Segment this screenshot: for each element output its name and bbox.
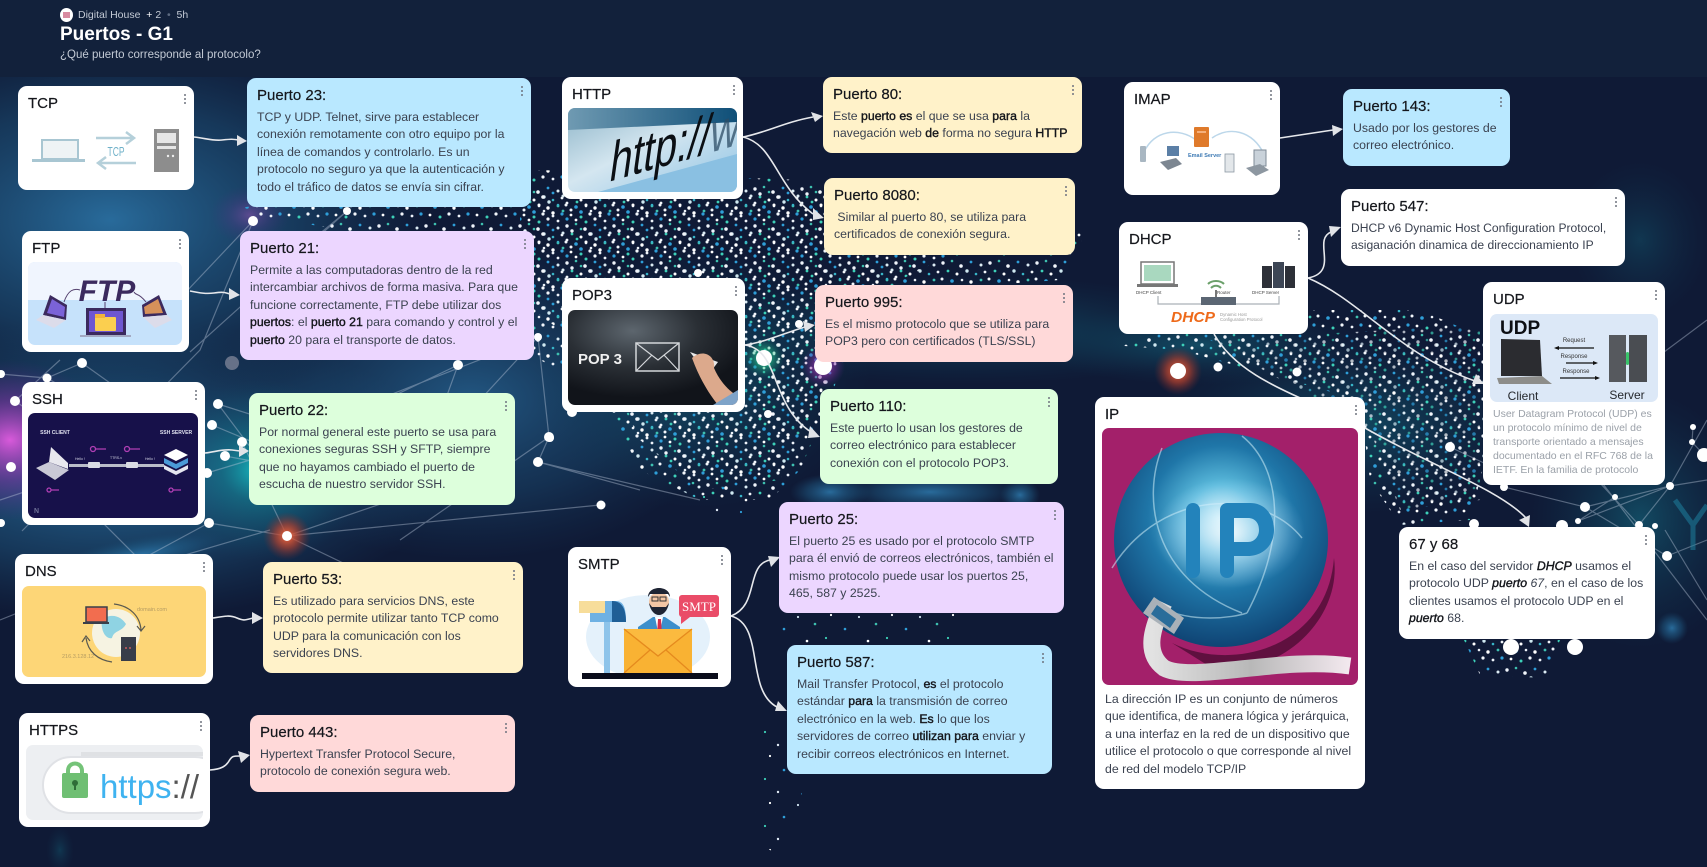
panel: Puerto 110: conexión con el protocolo POP3.	[830, 456, 1009, 470]
icon: email server diagram: Email Server	[1188, 153, 1222, 159]
panel: Puerto 22: escucha de nuestro servidor SSH.	[259, 477, 446, 491]
text block: IP description: La dirección IP es un conjunto de números	[1105, 692, 1338, 706]
panel: HTTPS: HTTPS	[29, 722, 78, 739]
panel: Puerto 587: Puerto 587:	[797, 654, 875, 671]
text block: IP description	[1105, 692, 1351, 776]
arrow: SMTP to Puerto 25	[731, 556, 780, 616]
panel: TCP	[18, 86, 194, 190]
panel: Puerto 443: Puerto 443:	[260, 724, 338, 741]
icon: UDP client server diagram: Server	[1609, 388, 1645, 402]
panel: SMTP	[568, 547, 731, 687]
panel: Puerto 25: El puerto 25 es usado por el protocolo SMTP	[789, 534, 1034, 548]
arrow: DHCP to UDP	[1308, 278, 1484, 384]
panel: Puerto 547	[1341, 189, 1625, 266]
panel: Puerto 995: POP3 pero con certificados (TLS/SSL)	[825, 334, 1036, 348]
panel: Puerto 110	[820, 389, 1058, 484]
panel: POP3: POP3	[572, 287, 612, 304]
icon: https address bar	[26, 745, 203, 820]
text block: IP description: utilice el protocolo o que corresponde al nivel	[1105, 744, 1351, 758]
panel: Puerto 23	[247, 78, 531, 207]
icon: DNS illustration: domain.com	[137, 607, 167, 613]
panel: Puerto 25: mismo protocolo puede usar los puertos 25,	[789, 569, 1028, 583]
icon: SSH tunnel diagram: SSH SERVER	[160, 430, 192, 436]
panel: DNS	[15, 554, 213, 684]
panel: HTTP	[562, 77, 743, 199]
arrow: POP3 to Puerto 995	[745, 321, 815, 345]
icon: DHCP network diagram: DHCP Client	[1136, 290, 1162, 295]
panel: 67 y 68: protocolo UDP puerto 67, en el caso de los	[1409, 576, 1643, 590]
title: Puertos - G1	[60, 24, 173, 45]
panel: DHCP: DHCP	[1129, 231, 1172, 248]
panel: Puerto 23: TCP y UDP. Telnet, sirve para establecer	[257, 110, 479, 124]
panel: 67 y 68: puerto 68.	[1409, 611, 1464, 625]
panel: Puerto 443	[250, 715, 515, 792]
arrow: HTTPS to Puerto 443	[210, 751, 250, 770]
panel: Puerto 995	[815, 285, 1073, 362]
arrow: SMTP to Puerto 587	[731, 616, 787, 711]
panel: Puerto 80: Puerto 80:	[833, 86, 902, 103]
panel: Puerto 53: servidores DNS.	[273, 646, 363, 660]
panel: HTTP: HTTP	[572, 86, 611, 103]
panel: Puerto 23: línea de comandos y controlarlo. Es un	[257, 145, 470, 159]
panel: Puerto 143	[1343, 89, 1510, 166]
panel: SSH	[22, 382, 205, 525]
panel: Puerto 53: UDP para la comunicación con los	[273, 629, 461, 643]
icon: DNS illustration: 216.3.128.12	[62, 654, 94, 660]
icon: SSH tunnel diagram	[28, 413, 198, 518]
panel: Puerto 547: asiganación dinamica de direccionamiento IP	[1351, 238, 1594, 252]
panel: UDP	[1483, 282, 1665, 485]
panel: HTTPS	[19, 713, 210, 827]
header band	[0, 0, 1707, 77]
arrow: POP3 to Puerto 110	[745, 345, 820, 438]
icon: SSH tunnel diagram: N	[34, 508, 39, 515]
icon: SMTP illustration: SMTP	[682, 599, 716, 614]
panel: Puerto 25	[779, 502, 1064, 613]
panel: IP: IP	[1105, 406, 1119, 423]
panel: Puerto 587: Mail Transfer Protocol, es el protocolo	[797, 677, 1003, 691]
text block: IP description: que identifica, de manera lógica y jerárquica,	[1105, 709, 1349, 723]
text block: UDP description: User Datagram Protocol (UDP) es	[1493, 408, 1652, 420]
panel: DNS: DNS	[25, 563, 57, 580]
icon: DHCP network diagram: Router	[1217, 290, 1231, 295]
panel: Puerto 22	[249, 393, 515, 505]
icon: POP 3 envelope photo: POP 3	[578, 351, 622, 368]
icon: DNS illustration	[22, 586, 206, 677]
panel: Puerto 443: protocolo de conexión segura web.	[260, 764, 451, 778]
panel: Puerto 143: Usado por los gestores de	[1353, 121, 1497, 135]
icon: email server diagram	[1140, 127, 1269, 176]
panel: IMAP: IMAP	[1134, 91, 1171, 108]
panel: Puerto 21	[240, 231, 534, 360]
icon: SSH tunnel diagram: SSH CLIENT	[40, 430, 70, 436]
panel: Puerto 21: Puerto 21:	[250, 240, 319, 257]
avatar icon	[60, 8, 73, 22]
icon: DHCP network diagram	[1136, 261, 1295, 326]
icon: https address bar: https://	[100, 768, 200, 805]
panel: Puerto 23: Puerto 23:	[257, 87, 326, 104]
panel: UDP: UDP	[1493, 291, 1525, 308]
arrow: SSH to Puerto 22	[205, 445, 249, 457]
panel: Puerto 23: conexión remotamente con otro equipo por la	[257, 127, 504, 141]
icon: FTP illustration	[28, 262, 182, 345]
text block: UDP description: documentado en el RFC 768 de la	[1493, 450, 1653, 462]
panel: Puerto 21: puertos: el puerto 21 para comando y control y el	[250, 315, 517, 329]
text block: UDP description: IETF. En la familia de protocolo	[1493, 464, 1638, 476]
icon: UDP client server diagram	[1490, 314, 1658, 402]
icon: SSH tunnel diagram: Hello !	[145, 457, 155, 461]
arrow: DNS to Puerto 53	[213, 612, 263, 624]
panel: 67 y 68: 67 y 68	[1409, 536, 1458, 553]
panel: FTP: FTP	[32, 240, 60, 257]
panel: Puerto 21: Permite a las computadoras dentro de la red	[250, 263, 493, 277]
panel: Puerto 53	[263, 562, 523, 673]
arrow: DHCP to Puerto 547	[1308, 226, 1341, 278]
panel: Puerto 80: navegación web de forma no segura HTTP	[833, 126, 1067, 140]
panel: Puerto 53: Puerto 53:	[273, 571, 342, 588]
panel: Puerto 8080	[824, 178, 1075, 255]
nodes	[0, 207, 1707, 655]
arrow: IMAP to Puerto 143	[1280, 125, 1343, 138]
panel: Puerto 143: correo electrónico.	[1353, 138, 1454, 152]
icon: IP globe	[1102, 428, 1358, 685]
panel: Puerto 547: Puerto 547:	[1351, 198, 1429, 215]
continents of dots	[225, 170, 1085, 500]
glows	[0, 30, 430, 410]
icon: SMTP illustration	[579, 588, 719, 679]
panel: Puerto 8080: Puerto 8080:	[834, 187, 920, 204]
panel: Puerto 22: que no hayamos cambiado el puerto de	[259, 460, 475, 474]
panel: Puerto 110: correo electrónico para establecer	[830, 438, 1016, 452]
network lines	[0, 211, 1707, 620]
panel: Puerto 22: Por normal general este puerto se usa para	[259, 425, 496, 439]
panel: Puerto 587: servidores de correo utilizan para enviar y	[797, 729, 1025, 743]
icon: DHCP network diagram: DHCP Server	[1252, 290, 1280, 295]
panel: TCP: TCP	[28, 95, 58, 112]
panel: Puerto 25: 465, 587 y 2525.	[789, 586, 881, 600]
panel: Puerto 547: DHCP v6 Dynamic Host Configuration Protocol,	[1351, 221, 1606, 235]
panel: 67 y 68	[1399, 527, 1655, 639]
panel: Puerto 22: Puerto 22:	[259, 402, 328, 419]
panel: 67 y 68: En el caso del servidor DHCP usamos el	[1409, 559, 1631, 573]
icon: SSH tunnel diagram: TTRS-v	[110, 456, 122, 460]
panel: Puerto 21: funcione correctamente, FTP debe utilizar dos	[250, 298, 501, 312]
workspace line: Digital House + 2 • 5h	[78, 9, 188, 21]
icon: UDP client server diagram: Response	[1562, 369, 1590, 375]
panel: 67 y 68: clientes usamos el protocolo UDP en el	[1409, 594, 1623, 608]
text block: IP description: de red del modelo TCP/IP	[1105, 762, 1246, 776]
panel: Puerto 587: estándar para la transmisión de correo	[797, 694, 1008, 708]
panel: Puerto 587	[787, 645, 1052, 774]
panel: Puerto 23: todo el tráfico de datos se envía sin cifrar.	[257, 180, 484, 194]
icon: TCP diagram: TCP	[108, 144, 124, 159]
arrow: DHCP to 67 y 68	[1214, 334, 1530, 527]
panel: SMTP: SMTP	[578, 556, 620, 573]
panel: Puerto 53: Es utilizado para servicios DNS, este	[273, 594, 475, 608]
arrow: FTP to Puerto 21	[190, 288, 240, 300]
icon: UDP client server diagram: Request	[1563, 338, 1586, 344]
icon: FTP illustration: FTP	[79, 275, 136, 308]
panel: IMAP	[1124, 82, 1280, 195]
panel: Puerto 8080: Similar al puerto 80, se utiliza para	[837, 210, 1026, 224]
panel: Puerto 587: electrónico en la web. Es lo que los	[797, 712, 990, 726]
panel: Puerto 21: intercambiar archivos de forma masiva. Para que	[250, 280, 518, 294]
icon: UDP client server diagram: UDP	[1500, 318, 1540, 339]
panel: Puerto 21: puerto 20 para el transporte de datos.	[250, 333, 456, 347]
panel: POP3	[562, 278, 745, 412]
panel: Puerto 25: Puerto 25:	[789, 511, 858, 528]
panel: Puerto 995: Puerto 995:	[825, 294, 903, 311]
panel: Puerto 80: Este puerto es el que se usa para la	[833, 109, 1030, 123]
panel: Puerto 80	[823, 77, 1082, 153]
text block: UDP description	[1493, 408, 1653, 476]
panel: SSH: SSH	[32, 391, 63, 408]
text block: UDP description: transporte orientado a mensajes	[1493, 436, 1644, 448]
icon: DHCP network diagram: DHCP	[1171, 309, 1216, 326]
panel: Puerto 443: Hypertext Transfer Protocol Secure,	[260, 747, 455, 761]
panel: Puerto 8080: certificados de conexión segura.	[834, 227, 1010, 241]
arrow: HTTP to Puerto 8080	[743, 137, 824, 220]
icon: UDP client server diagram: Response	[1560, 354, 1588, 360]
icon: SSH tunnel diagram: Hello !	[75, 457, 85, 461]
arrow: TCP to Puerto 23	[194, 135, 247, 146]
panel: Puerto 53: protocolo permite utilizar tanto TCP como	[273, 611, 499, 625]
icon: POP 3 envelope photo	[568, 310, 738, 405]
panel: Puerto 110: Este puerto lo usan los gestores de	[830, 421, 1023, 435]
panel: DHCP	[1119, 222, 1308, 334]
panel: Puerto 995: Es el mismo protocolo que se utiliza para	[825, 317, 1049, 331]
panel: Puerto 23: protocolo no seguro ya que la autenticación y	[257, 162, 504, 176]
panel: IP	[1095, 397, 1365, 789]
panel: Puerto 143: Puerto 143:	[1353, 98, 1431, 115]
icon: TCP diagram	[32, 129, 179, 172]
teal Y shape	[1675, 500, 1707, 550]
icon: DHCP network diagram: Configuration Protocol	[1220, 317, 1263, 322]
subtitle: ¿Qué puerto corresponde al protocolo?	[60, 49, 261, 61]
text block: UDP description: un protocolo mínimo de nivel de	[1493, 422, 1642, 434]
icon: DHCP network diagram: Dynamic Host	[1220, 312, 1248, 317]
panel: Puerto 25: para él envió de correos electrónicos, también el	[789, 551, 1054, 565]
panel: Puerto 587: recibir correos electrónicos en Internet.	[797, 747, 1010, 761]
panel: FTP	[22, 231, 189, 352]
panel: Puerto 22: conexiones seguras SSH y SFTP, siempre	[259, 442, 490, 456]
panel: Puerto 110: Puerto 110:	[830, 398, 906, 415]
arrow: HTTP to Puerto 80	[743, 112, 823, 137]
text block: IP description: a una interfaz en la red de un dispositivo que	[1105, 727, 1350, 741]
